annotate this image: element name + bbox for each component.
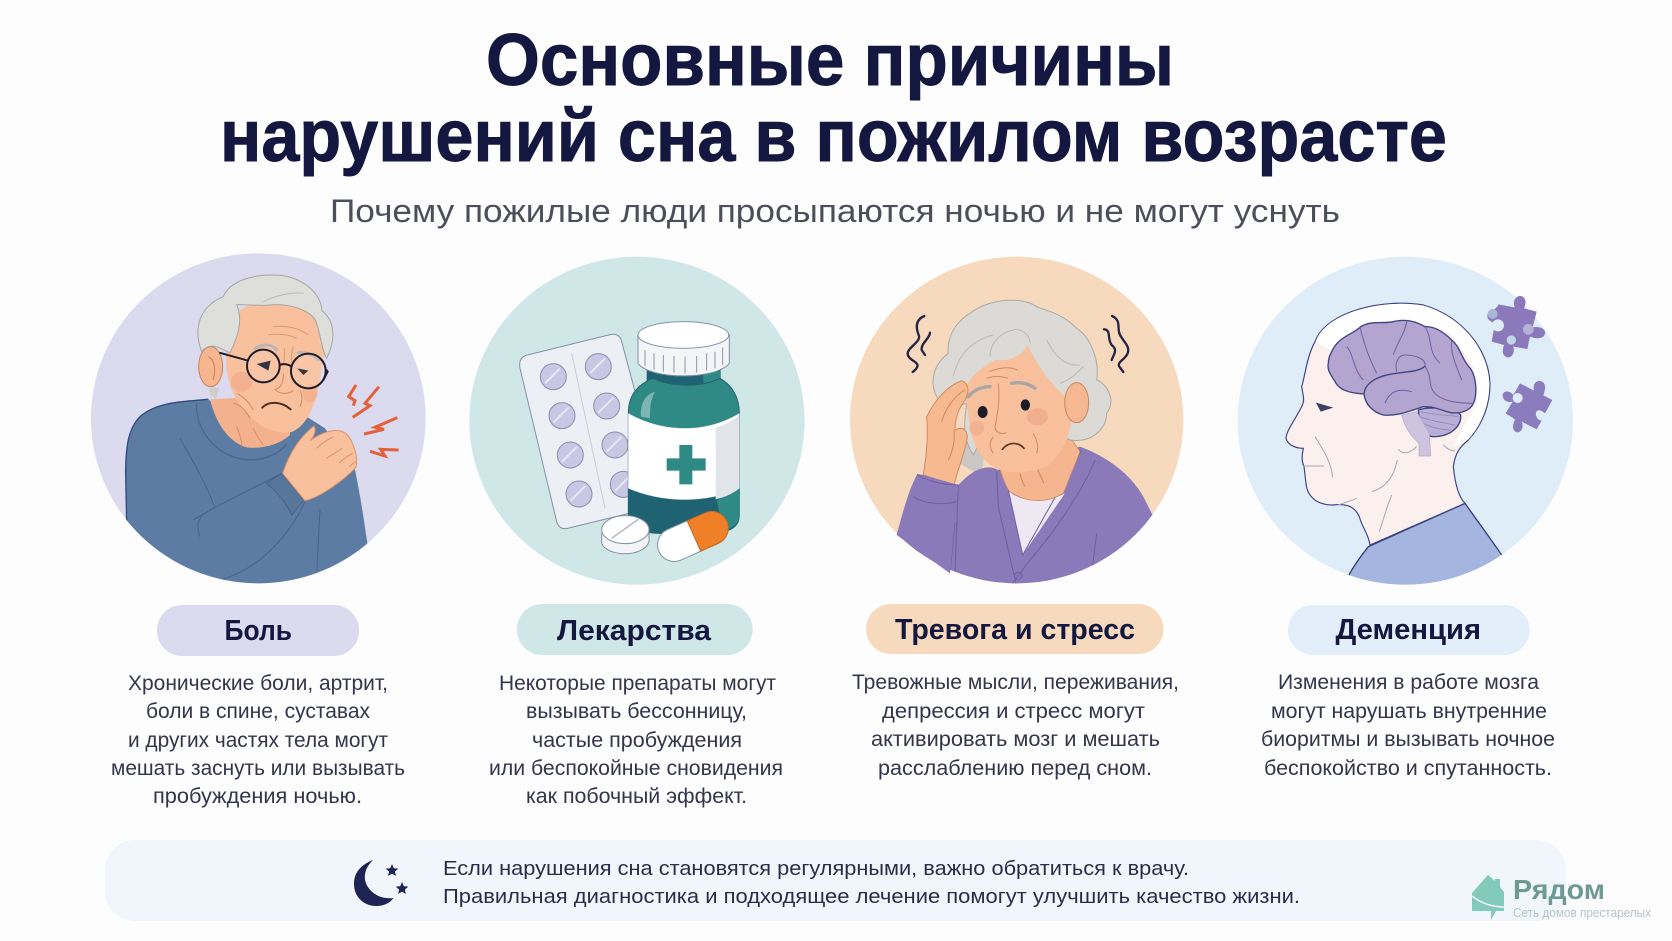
text: medication description [489,672,783,808]
panel: dementia [1238,257,1573,780]
callout text: Правильная диагностика и подходящее лечение помогут улучшить качество жизни. [443,885,1300,908]
text: pain description: боли в спине, суставах [146,700,370,723]
panel: pain [91,253,426,808]
title: Основные причины [486,20,1174,101]
illustration: elderly man holding shoulder [91,253,426,590]
text: dementia description: могут нарушать внутренние [1271,700,1547,723]
label: Деменция [1288,605,1530,655]
icon: house with speech tail [1472,875,1504,920]
icon: upper puzzle piece [1487,296,1545,357]
footer callout [105,840,1566,921]
text: pain description: пробуждения ночью. [153,785,362,808]
text: dementia description: биоритмы и вызывать ночное [1261,728,1555,751]
title: нарушений сна в пожилом возрасте [220,96,1447,177]
text: pain description: и других частях тела могут [128,729,388,752]
illustration: pills and bottle [469,257,805,585]
text: medication description: вызывать бессонницу, [526,700,747,723]
text: pain description: мешать заснуть или вызывать [111,757,405,780]
label: Лекарства [517,604,752,655]
label: Деменция: Деменция [1336,614,1481,646]
text: anxiety description: депрессия и стресс могут [882,700,1145,723]
text: anxiety description [852,671,1179,780]
icon: moon and stars [354,860,408,906]
text: medication description: частые пробуждения [532,729,742,752]
title [220,20,1447,177]
text: anxiety description: расслаблению перед сном. [878,757,1152,780]
logo: Рядом [1472,874,1652,920]
text: pain description: Хронические боли, артрит, [128,672,388,695]
panel: medication [469,257,805,808]
text: dementia description: Изменения в работе мозга [1278,671,1539,694]
subtitle: Почему пожилые люди просыпаются ночью и не могут уснуть [330,193,1340,229]
text: dementia description: беспокойство и спутанность. [1264,757,1552,780]
callout text [443,857,1300,908]
text: dementia description [1261,671,1555,780]
text: anxiety description: активировать мозг и мешать [871,728,1160,751]
text: medication description: как побочный эффект. [526,785,747,808]
label: Боль: Боль [224,615,292,647]
panel: anxiety [850,257,1183,780]
text: anxiety description: Тревожные мысли, переживания, [852,671,1179,694]
logo: Рядом: Сеть домов престарелых [1513,906,1652,920]
callout text: Если нарушения сна становятся регулярными, важно обратиться к врачу. [443,857,1189,880]
icon: lower puzzle piece [1503,381,1552,432]
text: medication description: или беспокойные сновидения [489,757,783,780]
label: Тревога и стресс [866,604,1164,654]
label: Тревога и стресс: Тревога и стресс [895,614,1135,646]
text: medication description: Некоторые препараты могут [499,672,776,695]
illustration: worried elderly woman [850,257,1183,590]
label: Боль [157,605,359,656]
illustration: head profile with brain and puzzle pieces [1238,257,1573,590]
label: Лекарства: Лекарства [557,615,712,647]
logo: Рядом: Рядом [1513,874,1605,905]
text: pain description [111,672,405,808]
